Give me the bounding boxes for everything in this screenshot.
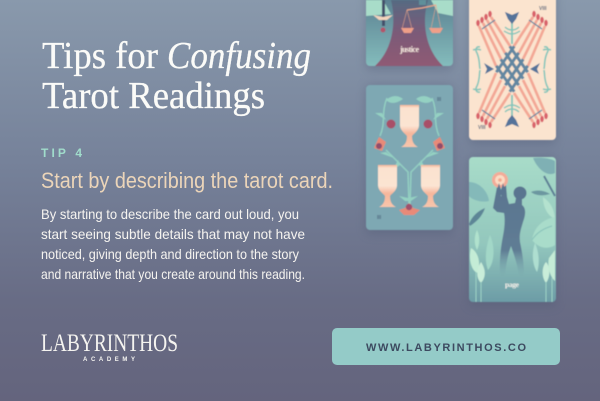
card: swords: VIII (478, 125, 486, 131)
card: cups: III (437, 97, 442, 103)
body text (41, 206, 305, 282)
title: Confusing (167, 35, 311, 77)
card: cups (366, 85, 453, 230)
cup left (378, 165, 397, 207)
card: cups: III (377, 215, 382, 221)
logo: LABYRINTHOS (41, 330, 178, 357)
body text: noticed, giving depth and direction to the story (41, 246, 299, 262)
page figure (493, 184, 525, 276)
button (332, 328, 560, 365)
card: justice: justice (399, 45, 419, 54)
title (42, 35, 311, 117)
cup top (400, 105, 419, 147)
card: page: page (505, 280, 520, 289)
card: swords: VIII (539, 6, 547, 12)
woven blades (496, 46, 528, 92)
logo: ACADEMY (83, 357, 135, 363)
title: Tarot Readings (42, 75, 265, 117)
tip heading: Start by describing the tarot card. (41, 168, 333, 193)
body text: and narrative that you create around this reading. (41, 266, 305, 282)
card: swords (469, 0, 556, 140)
card: justice (366, 0, 453, 66)
card: page (469, 157, 556, 302)
card shadows (366, 0, 556, 306)
button: WWW.LABYRINTHOS.CO (366, 342, 526, 354)
tip number: TIP 4 (41, 146, 82, 160)
body text: By starting to describe the card out loud, you (41, 206, 299, 222)
logo (41, 330, 178, 363)
body text: start seeing subtle details that may not have (41, 226, 305, 242)
title: Tips for (42, 35, 158, 77)
cup right (421, 165, 440, 207)
